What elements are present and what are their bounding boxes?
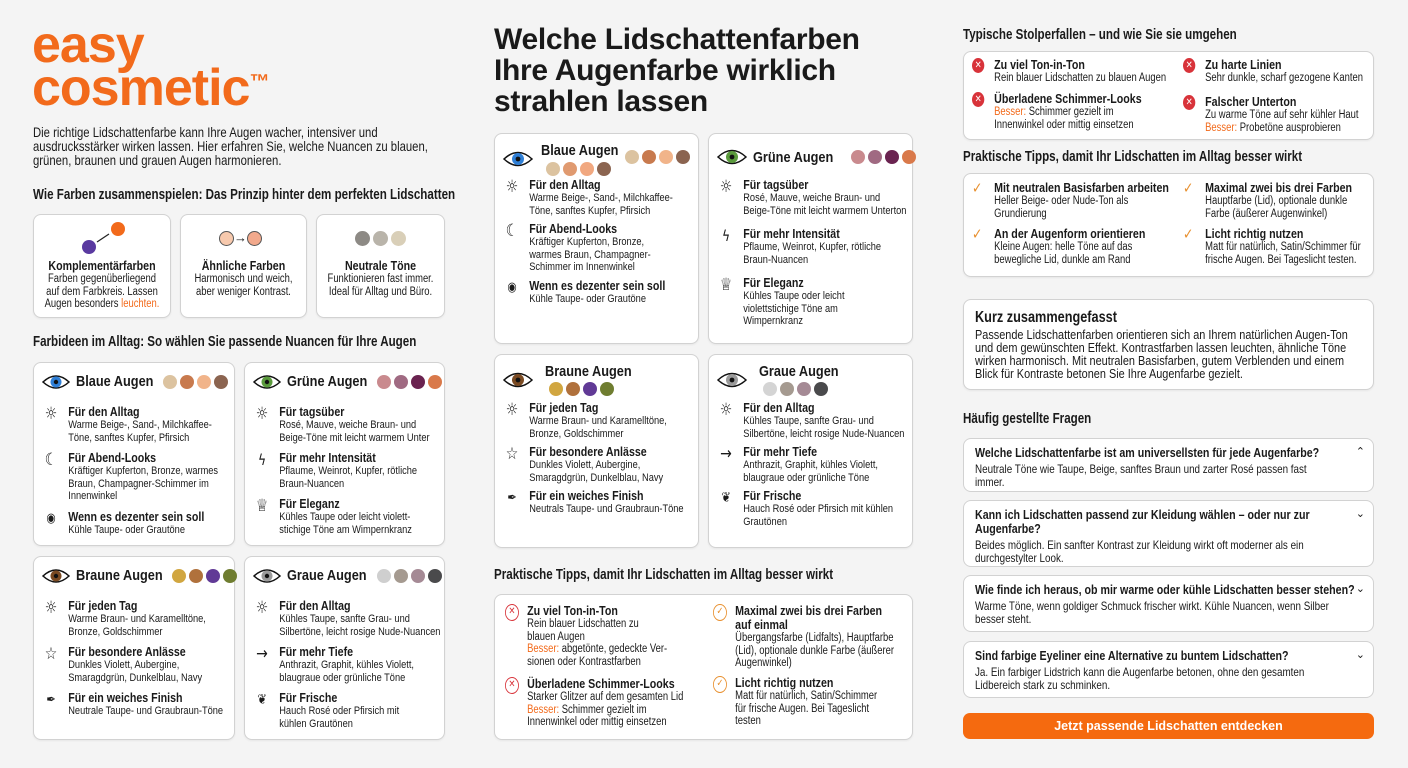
tip: light: ✓ xyxy=(717,678,723,689)
intro text xyxy=(33,125,428,168)
header: brown eyes xyxy=(503,363,632,396)
panel: practical tips (right) xyxy=(963,173,1374,277)
pitfall: hard lines xyxy=(1183,58,1373,84)
item: everyday xyxy=(506,177,673,216)
pitfall: undertone: ✕ xyxy=(1186,97,1193,108)
item: daytime xyxy=(256,404,430,444)
item: evening: Für Abend-Looks xyxy=(529,221,617,236)
item: freshness xyxy=(721,488,893,528)
item: soft finish: Für ein weiches Finish xyxy=(68,690,183,705)
header: green eyes: Grüne Augen xyxy=(753,148,833,166)
item: everyday xyxy=(45,404,212,444)
item: freshness: Für Frische xyxy=(743,488,801,503)
tip: max three xyxy=(1183,181,1373,220)
header: blue eyes xyxy=(42,373,228,390)
tip: light: Matt für natürlich, Satin/Schimmer xyxy=(735,690,877,702)
tip: max three colors xyxy=(713,604,908,670)
item: every day: Bronze, Goldschimmer xyxy=(68,626,162,638)
tip: tone in tone: Rein blauer Lidschatten zu xyxy=(527,618,639,630)
panel: blue eyes (left) xyxy=(33,362,235,546)
item: every day: Warme Braun- und Karamelltöne, xyxy=(68,613,206,625)
item: everyday: Warme Beige-, Sand-, Milchkaffee- xyxy=(68,419,212,431)
tip: neutral base: Grundierung xyxy=(994,208,1047,220)
tip: tone in tone xyxy=(505,603,667,668)
item: every day xyxy=(506,400,667,440)
title: Ihre Augenfarbe wirklich xyxy=(494,54,836,87)
title: Welche Lidschattenfarben xyxy=(494,23,860,56)
item: depth: Für mehr Tiefe xyxy=(743,444,817,459)
faq 1 xyxy=(963,438,1374,492)
item: depth xyxy=(720,444,878,484)
faq 3: Warme Töne, wenn goldiger Schmuck frischer wirkt. Kühle Nuancen, wenn Silber xyxy=(975,599,1329,613)
item: every day: ☼ xyxy=(506,400,518,420)
item: intensity: Braun-Nuancen xyxy=(743,254,808,266)
item: daytime: ☼ xyxy=(256,404,268,424)
tip: tone in tone: Besser: abgetönte, gedeckte Ver- xyxy=(527,643,667,655)
panel: summary: Kurz zusammengefasst xyxy=(975,309,1117,326)
header: green eyes: Grüne Augen xyxy=(287,373,367,390)
item: soft finish: Neutrals Taupe- und Graubraun-Töne xyxy=(529,503,684,515)
item: every day: Für jeden Tag xyxy=(529,400,598,415)
item: everyday: Kühles Taupe, sanfte Grau- und xyxy=(743,415,874,427)
heading: pitfalls: Typische Stolperfallen – und wie Sie sie umgehen xyxy=(963,27,1237,43)
panel: brown eyes (middle): Braune Augen xyxy=(545,363,632,380)
faq 2: Beides möglich. Ein sanfter Kontrast zur Kleidung wirkt oft moderner als ein xyxy=(975,538,1304,552)
item: every day: ☼ xyxy=(45,598,57,618)
item: daytime xyxy=(720,177,906,216)
pitfall: shimmer: Innenwinkel oder mittig einsetzen xyxy=(994,118,1134,130)
pitfall: undertone: Besser: Probetöne ausprobieren xyxy=(1205,122,1341,134)
item: special: Für besondere Anlässe xyxy=(529,444,647,459)
item: everyday: Töne, sanftes Kupfer, Pfirsich xyxy=(529,204,650,216)
item: evening: warmes Braun, Champagner- xyxy=(529,248,651,260)
item: subtle: Wenn es dezenter sein soll xyxy=(68,509,204,524)
item: everyday: Für den Alltag xyxy=(743,400,815,415)
item: subtle xyxy=(507,278,665,305)
panel: brown eyes (left) xyxy=(33,556,235,740)
item: intensity xyxy=(722,226,881,266)
item: depth: → xyxy=(720,444,732,464)
tip: tone in tone: blauen Augen xyxy=(527,630,585,642)
faq 2: ⌄ xyxy=(1356,507,1365,520)
item: special xyxy=(45,644,202,684)
item: evening xyxy=(45,450,218,502)
tip: max three: Hauptfarbe (Lid), optionale dunkle xyxy=(1205,195,1347,207)
item: everyday: Für den Alltag xyxy=(529,177,601,192)
button: CTA: Jetzt passende Lidschatten entdecken xyxy=(1054,719,1283,733)
pitfall: shimmer xyxy=(972,92,1182,131)
tip: neutral base: Heller Beige- oder Nude-Ton als xyxy=(994,195,1128,207)
item: soft finish: Für ein weiches Finish xyxy=(529,488,644,503)
item: depth: blaugraue oder grünliche Töne xyxy=(279,672,405,684)
item: depth: → xyxy=(256,644,268,664)
tip: eye shape: Kleine Augen: helle Töne auf das xyxy=(994,241,1132,253)
item: elegance: Für Eleganz xyxy=(279,496,340,511)
header: green eyes xyxy=(253,373,442,390)
faq 4: Ja. Ein farbiger Lidstrich kann die Augenfarbe betonen, ohne den gesamten xyxy=(975,665,1304,679)
faq 4: ⌄ xyxy=(1356,648,1365,661)
panel: neutral tones: Neutrale Töne xyxy=(345,258,416,273)
heading: principle: Wie Farben zusammenspielen: Das Prinzip hinter dem perfekten Lidschatten xyxy=(33,187,455,203)
item: depth: blaugraue oder grünliche Töne xyxy=(743,472,869,484)
logo: easy xyxy=(32,16,144,74)
item: everyday: Kühles Taupe, sanfte Grau- und xyxy=(279,613,410,625)
panel: similar colors: aber weniger Kontrast. xyxy=(196,286,291,298)
item: every day: Bronze, Goldschimmer xyxy=(529,428,623,440)
tip: light: Licht richtig nutzen xyxy=(735,675,833,690)
tip: shimmer: Überladene Schimmer-Looks xyxy=(527,676,675,691)
icon: similar dots: → xyxy=(234,230,247,245)
header: gray eyes: Graue Augen xyxy=(287,567,367,584)
tip: shimmer: Besser: Schimmer gezielt im xyxy=(527,704,647,716)
item: freshness: Hauch Rosé oder Pfirsich mit xyxy=(279,705,399,717)
pitfall: hard lines: Zu harte Linien xyxy=(1205,57,1282,72)
item: evening: Innenwinkel xyxy=(68,490,117,502)
panel: complementary: Augen besonders leuchten. xyxy=(45,298,159,310)
pitfall: tone in tone xyxy=(972,58,1182,84)
pitfall: shimmer: ✕ xyxy=(975,94,982,105)
faq 2: Kann ich Lidschatten passend zur Kleidung wählen – oder nur zur xyxy=(975,507,1310,522)
panel: similar colors: Harmonisch und weich, xyxy=(194,273,293,285)
faq 3: ⌄ xyxy=(1356,582,1365,595)
item: freshness: Grautönen xyxy=(743,516,787,528)
item: intensity: Braun-Nuancen xyxy=(279,478,344,490)
item: freshness: ❦ xyxy=(257,692,267,708)
item: evening: Schimmer im Innenwinkel xyxy=(529,261,635,273)
item: everyday: Für den Alltag xyxy=(279,598,351,613)
tip: tone in tone: ✕ xyxy=(509,606,515,617)
intro text: ausdrucksstärker wirken lassen. Hier erfahren Sie, welche Nuancen zu blauen, xyxy=(33,139,428,154)
item: subtle: Kühle Taupe- oder Grautöne xyxy=(529,293,646,305)
faq 1: Neutrale Töne wie Taupe, Beige, sanftes Braun und zarter Rosé passen fast xyxy=(975,462,1307,476)
panel: neutral tones xyxy=(316,214,445,318)
panel: practical tips (middle) xyxy=(494,594,913,740)
item: everyday: Silbertöne, leicht rosige Nude-Nuancen xyxy=(743,428,904,440)
tip: max three colors: Augenwinkel) xyxy=(735,657,792,669)
title xyxy=(494,23,860,118)
item: special: ☆ xyxy=(506,444,518,464)
tip: light: Licht richtig nutzen xyxy=(1205,226,1303,241)
panel: similar colors xyxy=(180,214,307,318)
panel: gray eyes (left) xyxy=(244,556,445,740)
item: subtle: ◉ xyxy=(46,511,56,526)
item: elegance: ♕ xyxy=(256,496,268,516)
faq 3 xyxy=(963,575,1374,632)
panel: green eyes (middle) xyxy=(708,133,913,344)
pitfall: hard lines: ✕ xyxy=(1186,60,1193,71)
item: soft finish: ✒ xyxy=(46,692,56,708)
panel: blue eyes (middle) xyxy=(494,133,699,344)
item: special: Smaragdgrün, Dunkelblau, Navy xyxy=(68,672,202,684)
item: every day: Warme Braun- und Karamelltöne, xyxy=(529,415,667,427)
item: subtle: ◉ xyxy=(507,280,517,295)
item: evening: ☾ xyxy=(506,221,518,241)
item: elegance: stichige Töne am Wimpernkranz xyxy=(279,524,412,536)
tip: light: Matt für natürlich, Satin/Schimmer für xyxy=(1205,241,1361,253)
pitfall: tone in tone: Rein blauer Lidschatten zu blauen Augen xyxy=(994,72,1166,84)
pitfall: tone in tone: ✕ xyxy=(975,60,982,71)
item: soft finish: Neutrale Taupe- und Graubraun-Töne xyxy=(68,705,223,717)
pitfall: undertone xyxy=(1183,95,1373,134)
item: intensity: Für mehr Intensität xyxy=(743,226,840,241)
title: strahlen lassen xyxy=(494,85,708,118)
icon: complementary dots xyxy=(82,222,125,254)
item: intensity xyxy=(258,450,417,490)
tip: light xyxy=(713,676,908,728)
item: intensity: Pflaume, Weinrot, Kupfer, rötliche xyxy=(279,465,417,477)
item: special: Dunkles Violett, Aubergine, xyxy=(68,659,179,671)
item: freshness: ❦ xyxy=(721,490,731,506)
tip: neutral base xyxy=(972,181,1182,220)
item: subtle: Kühle Taupe- oder Grautöne xyxy=(68,524,185,536)
panel: summary xyxy=(963,299,1374,390)
panel: brown eyes (middle) xyxy=(494,354,699,548)
item: special xyxy=(506,444,664,484)
header: blue eyes: Blaue Augen xyxy=(76,373,153,390)
faq 3: besser steht. xyxy=(975,612,1031,626)
item: evening xyxy=(506,221,651,273)
faq 2: Augenfarbe? xyxy=(975,521,1041,536)
panel: pitfalls xyxy=(963,51,1374,140)
tip: shimmer: Starker Glitzer auf dem gesamten Lid xyxy=(527,691,683,703)
item: daytime: Beige-Töne mit leicht warmem Unter xyxy=(279,432,430,444)
item: special: Für besondere Anlässe xyxy=(68,644,186,659)
item: intensity: Für mehr Intensität xyxy=(279,450,376,465)
tip: light: für frische Augen. Bei Tageslicht xyxy=(735,702,869,714)
intro text: grünen, braunen und grauen Augen harmonieren. xyxy=(33,153,281,168)
item: intensity: ϟ xyxy=(258,451,266,469)
item: depth: Für mehr Tiefe xyxy=(279,644,353,659)
item: soft finish: ✒ xyxy=(507,490,517,506)
tip: eye shape: An der Augenform orientieren xyxy=(994,226,1145,241)
intro text: Die richtige Lidschattenfarbe kann Ihre Augen wacher, intensiver und xyxy=(33,125,378,140)
item: elegance: Kühles Taupe oder leicht violett- xyxy=(279,511,410,523)
heading: FAQ: Häufig gestellte Fragen xyxy=(963,411,1091,427)
tip: light: ✓ xyxy=(1183,225,1193,243)
panel: green eyes (left) xyxy=(244,362,445,546)
panel: complementary: Komplementärfarben xyxy=(48,258,156,273)
tip: light: testen xyxy=(735,715,761,727)
panel: complementary: auf dem Farbkreis. Lassen xyxy=(46,286,158,298)
pitfall: tone in tone: Zu viel Ton-in-Ton xyxy=(994,57,1085,72)
item: freshness: kühlen Grautönen xyxy=(279,718,353,730)
item: everyday: Töne, sanftes Kupfer, Pfirsich xyxy=(68,432,189,444)
tip: tone in tone: Zu viel Ton-in-Ton xyxy=(527,603,618,618)
panel: gray eyes (middle): Graue Augen xyxy=(759,363,839,380)
heading: practical tips (middle): Praktische Tipps, damit Ihr Lidschatten im Alltag besser wirkt xyxy=(494,567,833,583)
item: elegance: Kühles Taupe oder leicht xyxy=(743,290,845,302)
faq 2 xyxy=(963,500,1374,567)
item: soft finish xyxy=(46,690,223,717)
item: intensity: ϟ xyxy=(722,227,730,245)
item: everyday: Warme Beige-, Sand-, Milchkaffee- xyxy=(529,192,673,204)
panel: complementary xyxy=(33,214,171,318)
faq 2: durchgestylter Look. xyxy=(975,550,1064,564)
item: daytime: Beige-Töne mit leicht warmem Unterton xyxy=(743,204,906,216)
logo xyxy=(32,16,268,117)
tip: max three: ✓ xyxy=(1183,179,1193,197)
header: green eyes xyxy=(717,148,916,166)
panel: neutral tones: Ideal für Alltag und Büro. xyxy=(329,286,432,298)
faq 4: Sind farbige Eyeliner eine Alternative zu buntem Lidschatten? xyxy=(975,648,1289,663)
tip: neutral base: ✓ xyxy=(972,179,982,197)
panel: blue eyes (middle): Blaue Augen xyxy=(541,142,618,159)
header: brown eyes xyxy=(42,567,237,584)
panel: summary: und dem gewünschten Effekt. Kontrastfarben lassen leuchten, ähnliche Töne xyxy=(975,340,1346,355)
item: evening: Braun, Champagner-Schimmer im xyxy=(68,478,209,490)
tip: neutral base: Mit neutralen Basisfarben arbeiten xyxy=(994,180,1169,195)
item: depth: Anthrazit, Graphit, kühles Violett, xyxy=(743,459,878,471)
logo: cosmetic™ xyxy=(32,59,268,117)
icon: similar dots xyxy=(219,230,262,246)
pitfall: hard lines: Sehr dunkle, scharf gezogene Kanten xyxy=(1205,72,1363,84)
tip: shimmer: ✕ xyxy=(509,679,515,690)
panel: neutral tones: Funktionieren fast immer. xyxy=(328,273,433,285)
item: everyday xyxy=(720,400,904,440)
item: subtle xyxy=(46,509,204,536)
tip: eye shape xyxy=(972,227,1182,266)
item: every day: Für jeden Tag xyxy=(68,598,137,613)
panel: summary: Passende Lidschattenfarben orientieren sich an Ihrem natürlichen Augen-Ton xyxy=(975,327,1348,342)
panel: complementary: Farben gegenüberliegend xyxy=(48,273,156,285)
faq 1: immer. xyxy=(975,474,1005,488)
item: evening: Kräftiger Kupferton, Bronze, warmes xyxy=(68,465,218,477)
faq 3: Wie finde ich heraus, ob mir warme oder kühle Lidschatten besser stehen? xyxy=(975,582,1355,597)
item: freshness: Hauch Rosé oder Pfirsich mit kühlen xyxy=(743,503,893,515)
item: everyday: ☼ xyxy=(506,177,518,197)
faq 1: ⌃ xyxy=(1356,445,1365,458)
tip: light: frische Augen. Bei Tageslicht testen. xyxy=(1205,254,1356,266)
tip: max three colors: Übergangsfarbe (Lidfalts), Hauptfarbe xyxy=(735,632,893,644)
item: everyday: ☼ xyxy=(45,404,57,424)
item: daytime: Für tagsüber xyxy=(279,404,344,419)
tip: max three colors: auf einmal xyxy=(735,617,788,632)
item: elegance: ♕ xyxy=(720,275,732,295)
tip: eye shape: bewegliche Lid, dunkle am Rand xyxy=(994,254,1130,266)
pitfall: undertone: Zu warme Töne auf sehr kühler Haut xyxy=(1205,109,1359,121)
tip: max three colors: ✓ xyxy=(717,606,723,617)
tip: shimmer: Innenwinkel oder mittig einsetzen xyxy=(527,716,667,728)
pitfall: shimmer: Überladene Schimmer-Looks xyxy=(994,91,1142,106)
tip: tone in tone: sionen oder Kontrastfarben xyxy=(527,656,641,668)
tip: max three colors: Maximal zwei bis drei Farben xyxy=(735,603,882,618)
item: daytime: Für tagsüber xyxy=(743,177,808,192)
item: depth xyxy=(256,644,414,684)
tip: max three colors: (Lid), optionale dunkle Farbe (äußerer xyxy=(735,644,894,656)
item: daytime: ☼ xyxy=(720,177,732,197)
heading: color ideas: Farbideen im Alltag: So wählen Sie passende Nuancen für Ihre Augen xyxy=(33,334,416,350)
item: subtle: Wenn es dezenter sein soll xyxy=(529,278,665,293)
header: blue eyes xyxy=(503,142,690,176)
item: elegance xyxy=(720,275,845,327)
tip: shimmer xyxy=(505,676,683,728)
item: freshness: Für Frische xyxy=(279,690,337,705)
header: gray eyes xyxy=(253,567,442,584)
header: gray eyes xyxy=(717,363,839,396)
item: everyday: ☼ xyxy=(720,400,732,420)
item: freshness xyxy=(257,690,400,730)
item: everyday: ☼ xyxy=(256,598,268,618)
item: elegance: violettstichige Töne am xyxy=(743,302,838,314)
panel: summary: Blick für Kontraste betonen Sie Ihre Augenfarbe gezielt. xyxy=(975,366,1243,381)
item: depth: Anthrazit, Graphit, kühles Violett, xyxy=(279,659,414,671)
heading: practical tips (right): Praktische Tipps, damit Ihr Lidschatten im Alltag besser wirkt xyxy=(963,149,1302,165)
item: intensity: Pflaume, Weinrot, Kupfer, rötliche xyxy=(743,241,881,253)
item: everyday: Silbertöne, leicht rosige Nude-Nuancen xyxy=(279,626,440,638)
panel: gray eyes (middle) xyxy=(708,354,913,548)
faq 1: Welche Lidschattenfarbe ist am universellsten für jede Augenfarbe? xyxy=(975,445,1319,460)
panel: similar colors: Ähnliche Farben xyxy=(202,258,285,273)
item: elegance: Wimpernkranz xyxy=(743,315,803,327)
icon: neutral dots xyxy=(355,231,406,246)
item: evening: Für Abend-Looks xyxy=(68,450,156,465)
pitfall: undertone: Falscher Unterton xyxy=(1205,94,1296,109)
item: special: Smaragdgrün, Dunkelblau, Navy xyxy=(529,472,663,484)
tip: max three: Farbe (äußerer Augenwinkel) xyxy=(1205,208,1327,220)
item: special: ☆ xyxy=(45,644,57,664)
button: CTA xyxy=(963,713,1374,739)
item: daytime: Rosé, Mauve, weiche Braun- und xyxy=(279,419,416,431)
item: daytime: Rosé, Mauve, weiche Braun- und xyxy=(743,192,880,204)
item: everyday: Für den Alltag xyxy=(68,404,140,419)
item: elegance xyxy=(256,496,412,536)
pitfall: shimmer: Besser: Schimmer gezielt im xyxy=(994,106,1114,118)
header: brown eyes: Braune Augen xyxy=(76,567,163,584)
faq 4: Lidbereich stark zu schminken. xyxy=(975,678,1110,692)
tip: eye shape: ✓ xyxy=(972,225,982,243)
item: elegance: Für Eleganz xyxy=(743,275,804,290)
faq 4 xyxy=(963,641,1374,698)
item: everyday xyxy=(256,598,440,638)
item: soft finish xyxy=(507,488,684,515)
item: evening: Kräftiger Kupferton, Bronze, xyxy=(529,236,644,248)
panel: summary: wirken harmonisch. Mit neutralen Basisfarben, gutem Verblenden und einem xyxy=(975,353,1344,368)
tip: light xyxy=(1183,227,1373,266)
item: special: Dunkles Violett, Aubergine, xyxy=(529,459,640,471)
item: evening: ☾ xyxy=(45,450,57,470)
tip: max three: Maximal zwei bis drei Farben xyxy=(1205,180,1352,195)
item: every day xyxy=(45,598,206,638)
